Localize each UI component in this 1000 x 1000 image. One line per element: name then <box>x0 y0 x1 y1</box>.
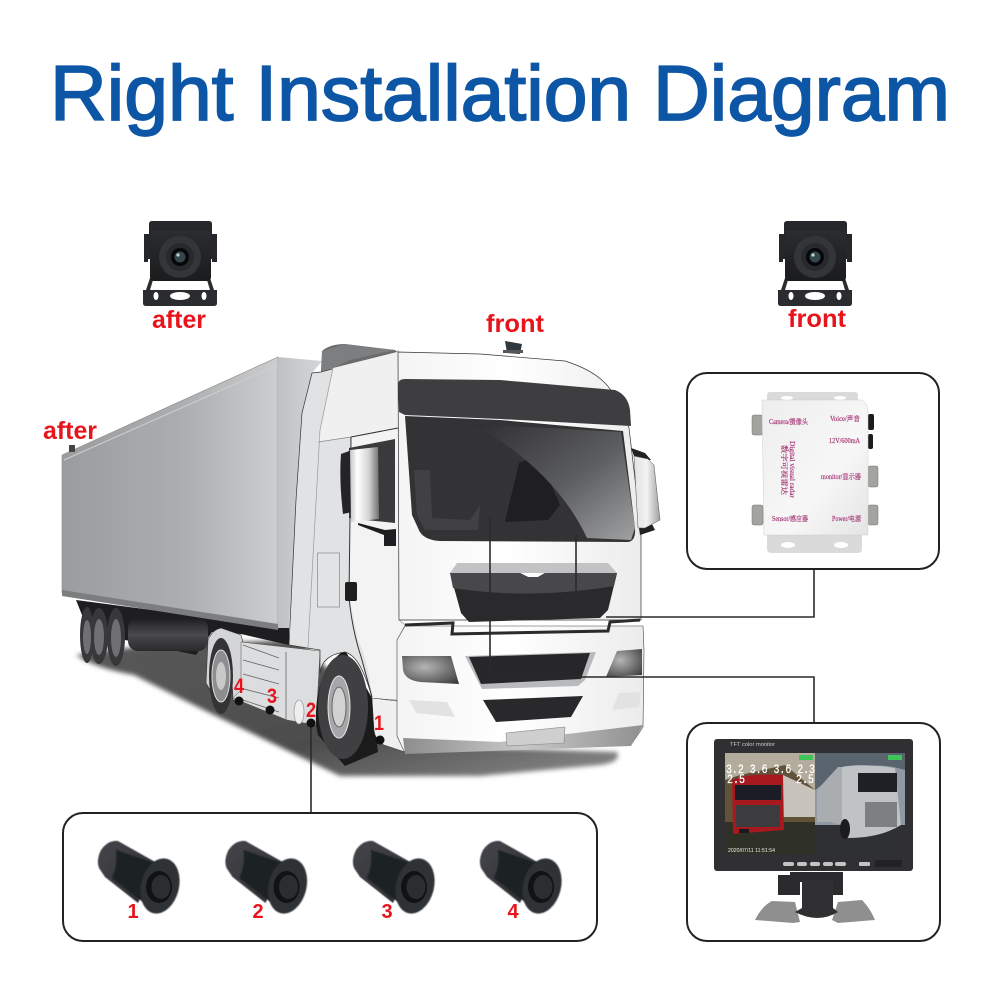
screen readouts: 2.5 <box>727 773 745 787</box>
sensor 2 <box>225 841 313 918</box>
screen status tags <box>799 755 902 760</box>
fuel tank <box>128 618 208 651</box>
panel: monitor <box>687 723 940 941</box>
label: front: front <box>788 305 847 333</box>
door line <box>349 428 398 697</box>
right mirror <box>631 448 655 535</box>
trailer front face <box>278 357 322 628</box>
sensor 4 <box>480 841 567 918</box>
air intake <box>483 696 583 722</box>
sensor numbers on truck: 1 <box>374 712 384 735</box>
door handle <box>345 582 357 601</box>
module connectors <box>752 415 878 525</box>
cab upper panel <box>318 351 398 442</box>
monitor stand plate <box>755 900 875 923</box>
rear tractor wheel <box>209 638 233 714</box>
module body <box>762 400 868 535</box>
windshield reflection <box>473 424 635 540</box>
panel: control module: 数字可视雷达 <box>780 445 789 495</box>
monitor screen left view <box>725 753 815 854</box>
silver truck <box>817 765 901 839</box>
panel: control module: Digital visual radar <box>788 441 796 499</box>
date stamp: 2020/07/11 11:51:54 <box>728 848 775 854</box>
monitor neck <box>795 880 838 918</box>
door panel <box>318 553 340 607</box>
side window <box>349 439 395 523</box>
red truck <box>732 775 815 834</box>
sensor numbers: 4 <box>507 901 519 923</box>
bumper <box>397 626 644 753</box>
sensor points on truck <box>234 696 384 744</box>
sensor numbers on truck <box>234 675 384 735</box>
truck illustration <box>62 341 660 776</box>
cab side <box>289 351 405 700</box>
screen readouts: 2.5 <box>796 773 814 787</box>
sensor numbers on truck: 2 <box>306 699 316 722</box>
sensor 1 <box>98 841 185 918</box>
number plate <box>506 727 565 746</box>
label: front on truck: front <box>486 310 545 338</box>
upper grille <box>450 563 617 573</box>
icon: front camera <box>778 221 852 306</box>
headlights <box>402 656 459 684</box>
panel: control module: 12V/600mA <box>829 437 860 445</box>
sensor 3 <box>353 841 440 918</box>
front wheel arch <box>316 650 378 766</box>
roof deflector <box>321 344 397 372</box>
sensor numbers on truck: 3 <box>267 685 277 708</box>
visor <box>398 379 631 426</box>
cab/bumper gap <box>405 620 640 634</box>
cab corner <box>372 698 405 752</box>
door <box>349 428 405 700</box>
side skirt <box>233 642 320 725</box>
front wheel <box>318 655 368 759</box>
label: after: after <box>152 306 206 334</box>
module flanges <box>767 392 862 553</box>
panel: control module: Sensor/感应器 <box>772 514 808 523</box>
trailer chassis <box>76 600 289 655</box>
monitor brand text: TFT color monitor <box>730 742 775 748</box>
sensor numbers on truck: 4 <box>234 675 244 698</box>
label: after on truck: after <box>43 417 97 445</box>
cab interior <box>505 460 560 522</box>
connector lines <box>311 517 814 813</box>
sensor numbers: 1 <box>127 901 139 923</box>
fog lamps <box>409 700 455 717</box>
rear tractor fender <box>206 628 245 700</box>
ground shadow <box>76 640 618 776</box>
module labels: Camera/摄像头 <box>769 417 809 426</box>
panel: control module: Voice/声音 <box>830 414 860 423</box>
title: Right Installation Diagram <box>50 49 950 137</box>
monitor screen right view <box>815 753 905 854</box>
rear-mounted camera <box>69 445 75 452</box>
monitor buttons <box>783 862 870 866</box>
panel: parking sensors <box>63 813 597 941</box>
windshield <box>405 416 635 542</box>
icon: rear camera <box>143 221 217 306</box>
sensor numbers <box>127 901 519 923</box>
screen readouts: 3.2 3.6 3.6 2.3 <box>726 763 815 777</box>
cab front <box>398 352 641 620</box>
roof camera <box>505 341 522 354</box>
sensor numbers: 3 <box>381 901 393 923</box>
panel: control module <box>687 373 939 569</box>
panel: control module: monitor/显示器 <box>821 472 861 481</box>
panel: control module: Power/电源 <box>832 514 862 523</box>
bumper bottom strip <box>403 725 643 754</box>
trailer side <box>62 357 278 628</box>
screen readouts <box>726 763 815 787</box>
monitor bezel <box>714 739 913 871</box>
side mirror <box>340 450 352 514</box>
lower grille <box>465 652 596 689</box>
sensor numbers: 2 <box>252 901 264 923</box>
trailer wheels <box>80 607 125 666</box>
monitor stand joints <box>778 872 843 895</box>
